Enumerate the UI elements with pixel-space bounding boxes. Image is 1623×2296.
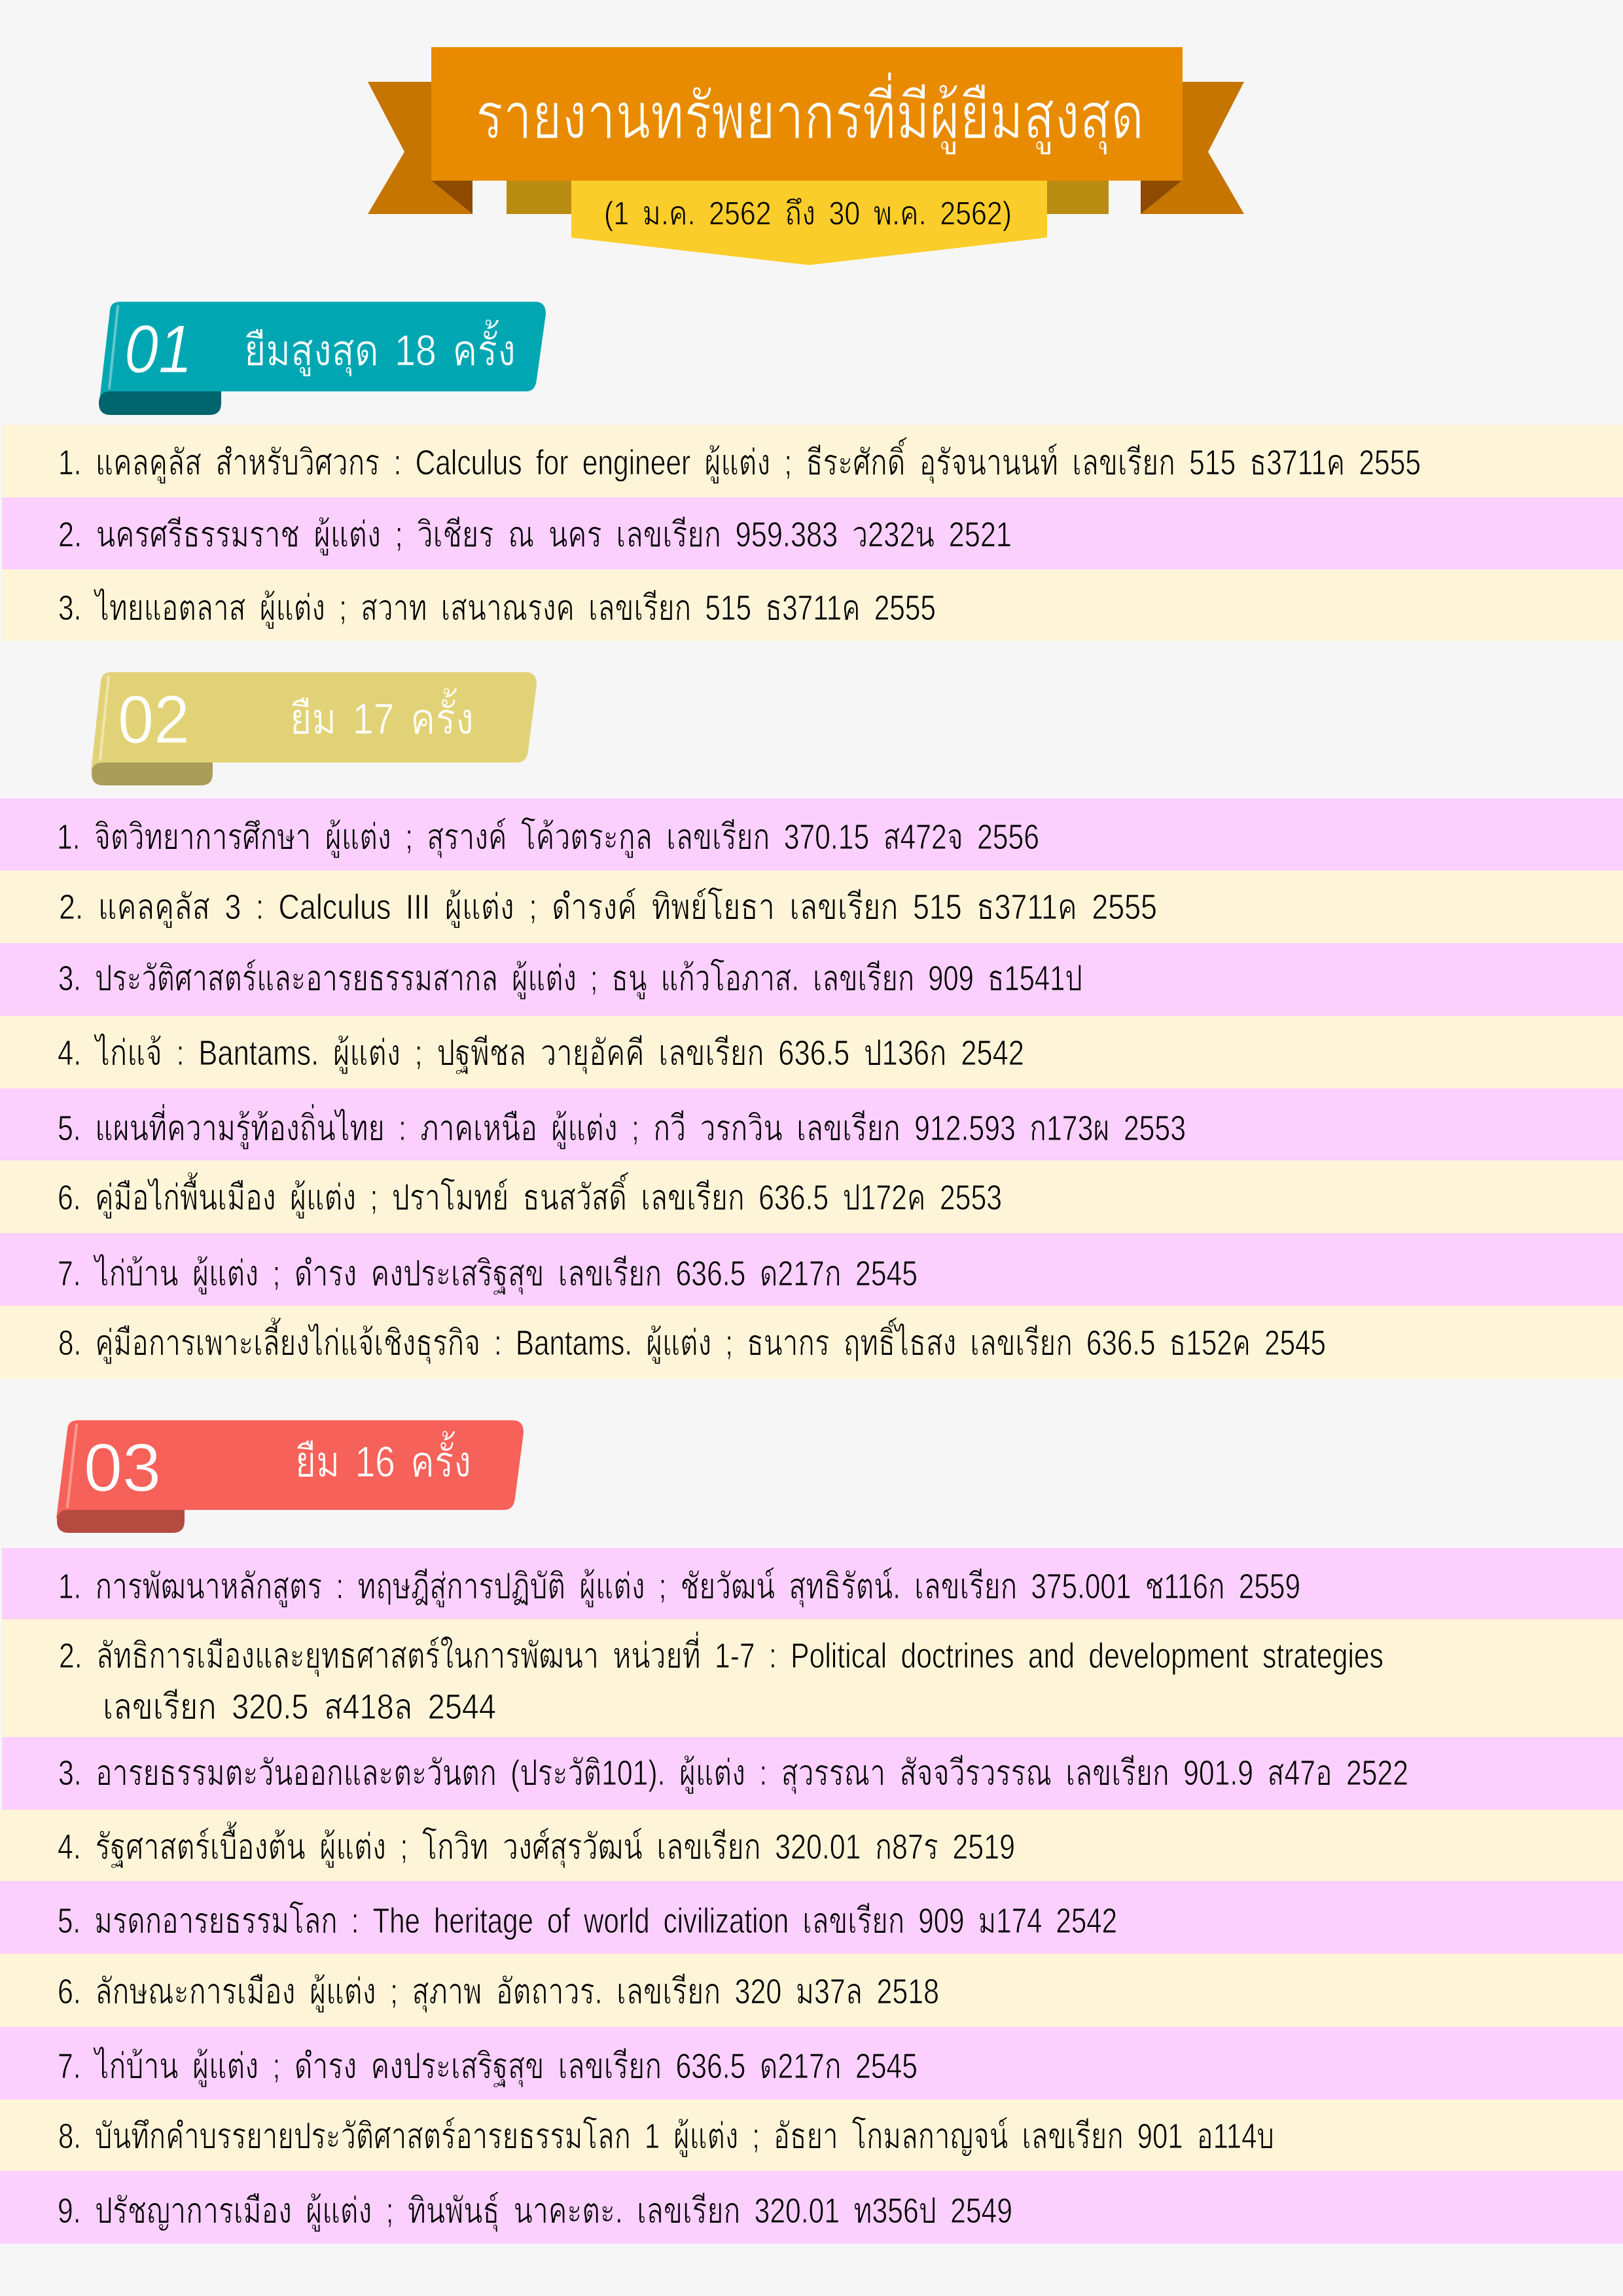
section 3 heading: ยืม 16 ครั้ง bbox=[295, 1431, 471, 1486]
section 3 list: 7. ไก่บ้าน ผู้แต่ง ; ดำรง คงประเสริฐสุข เลขเรียก 636.5 ด217ก 2545 bbox=[58, 2046, 918, 2088]
section 1 list bbox=[2, 425, 1623, 641]
section 2 number: 02 bbox=[118, 682, 190, 758]
section 3 list: 6. ลักษณะการเมือง ผู้แต่ง ; สุภาพ อัตถาวร. เลขเรียก 320 ม37ล 2518 bbox=[58, 1972, 939, 2013]
section 3 list: 4. รัฐศาสตร์เบื้องต้น ผู้แต่ง ; โกวิท วงศ์สุรวัฒน์ เลขเรียก 320.01 ก87ร 2519 bbox=[58, 1821, 1015, 1869]
section 3 list bbox=[0, 1548, 1623, 2244]
section 2 list: 1. จิตวิทยาการศึกษา ผู้แต่ง ; สุรางค์ โค้วตระกูล เลขเรียก 370.15 ส472จ 2556 bbox=[57, 817, 1039, 859]
section 1 list: 3. ไทยแอตลาส ผู้แต่ง ; สวาท เสนาณรงค เลขเรียก 515 ธ3711ค 2555 bbox=[58, 588, 936, 629]
section 1 number: 01 bbox=[124, 312, 192, 387]
section 3 list: 5. มรดกอารยธรรมโลก : The heritage of world civilization เลขเรียก 909 ม174 2542 bbox=[58, 1901, 1117, 1941]
section 3 list: 9. ปรัชญาการเมือง ผู้แต่ง ; ทินพันธุ์ นาคะตะ. เลขเรียก 320.01 ท356ป 2549 bbox=[58, 2191, 1012, 2233]
section 3 number: 03 bbox=[84, 1430, 161, 1506]
section 2 banner bbox=[91, 672, 537, 785]
section 1 list: 2. นครศรีธรรมราช ผู้แต่ง ; วิเชียร ณ นคร เลขเรียก 959.383 ว232น 2521 bbox=[58, 515, 1012, 556]
title ribbon bbox=[368, 47, 1244, 265]
section 3 list: เลขเรียก 320.5 ส418ล 2544 bbox=[103, 1687, 496, 1727]
section 2 list: 2. แคลคูลัส 3 : Calculus III ผู้แต่ง ; ดำรงค์ ทิพย์โยธา เลขเรียก 515 ธ3711ค 2555 bbox=[59, 887, 1157, 928]
section 2 list: 5. แผนที่ความรู้ท้องถิ่นไทย : ภาคเหนือ ผู้แต่ง ; กวี วรกวิน เลขเรียก 912.593 ก173ผ 2553 bbox=[58, 1103, 1186, 1149]
date range subtitle: (1 ม.ค. 2562 ถึง 30 พ.ค. 2562) bbox=[604, 195, 1012, 232]
section 2 list: 7. ไก่บ้าน ผู้แต่ง ; ดำรง คงประเสริฐสุข เลขเรียก 636.5 ด217ก 2545 bbox=[58, 1253, 918, 1295]
title text: รายงานทรัพยากรที่มีผู้ยืมสูงสุด bbox=[476, 72, 1144, 155]
section 2 list: 4. ไก่แจ้ : Bantams. ผู้แต่ง ; ปฐพีชล วายุอัคคี เลขเรียก 636.5 ป136ก 2542 bbox=[58, 1033, 1024, 1075]
section 1 banner bbox=[99, 302, 546, 415]
section 3 list: 1. การพัฒนาหลักสูตร : ทฤษฎีสู่การปฏิบัติ ผู้แต่ง ; ชัยวัฒน์ สุทธิรัตน์. เลขเรียก 375.001 ช116ก 2559 bbox=[58, 1567, 1300, 1608]
section 2 list: 3. ประวัติศาสตร์และอารยธรรมสากล ผู้แต่ง ; ธนู แก้วโอภาส. เลขเรียก 909 ธ1541ป bbox=[58, 958, 1082, 999]
section 2 list: 6. คู่มือไก่พื้นเมือง ผู้แต่ง ; ปราโมทย์ ธนสวัสดิ์ เลขเรียก 636.5 ป172ค 2553 bbox=[58, 1172, 1002, 1219]
section 3 list: 8. บันทึกคำบรรยายประวัติศาสตร์อารยธรรมโลก 1 ผู้แต่ง ; อัธยา โกมลกาญจน์ เลขเรียก 901 อ114บ bbox=[58, 2116, 1274, 2157]
section 3 banner bbox=[56, 1420, 524, 1533]
section 1 heading: ยืมสูงสุด 18 ครั้ง bbox=[244, 319, 516, 377]
section 2 heading: ยืม 17 ครั้ง bbox=[290, 688, 474, 743]
section 2 list bbox=[0, 798, 1623, 1378]
